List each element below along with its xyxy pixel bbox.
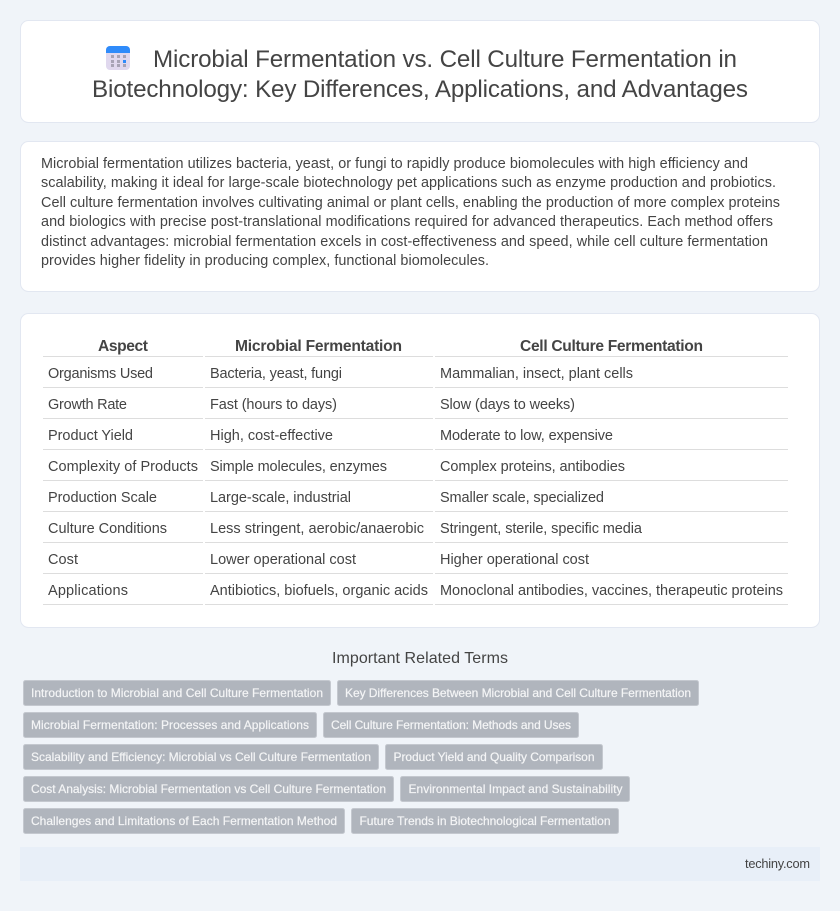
- table header: Microbial Fermentation: [235, 338, 402, 355]
- tag: [24, 680, 330, 706]
- icon: calendar: [106, 46, 130, 70]
- footer: techiny.com: [745, 856, 810, 871]
- panel: title header: [20, 20, 820, 122]
- table row: product yield: High, cost-effective: [210, 428, 333, 444]
- table row: complexity of products: Complexity of Products: [48, 459, 198, 475]
- tag: [400, 776, 630, 802]
- table row: growth rate: Fast (hours to days): [210, 397, 337, 413]
- table row: cost: Lower operational cost: [210, 552, 356, 568]
- table row: applications: [43, 583, 788, 605]
- table row: growth rate: Growth Rate: [48, 397, 127, 413]
- table row: applications: Applications: [48, 583, 128, 599]
- table row: organisms used: [43, 366, 788, 388]
- title: Biotechnology: Key Differences, Applications, and Advantages: [92, 76, 748, 103]
- table row: complexity of products: [43, 459, 788, 481]
- title: Microbial Fermentation vs. Cell Culture Fermentation in: [153, 46, 737, 73]
- table row: complexity of products: Complex proteins, antibodies: [440, 459, 625, 475]
- table header: Aspect: [98, 338, 148, 355]
- table row: culture conditions: Less stringent, aerobic/anaerobic: [210, 521, 424, 537]
- title: [92, 46, 748, 103]
- tag: Environmental Impact and Sustainability: [408, 782, 622, 796]
- heading: important related terms: Important Related Terms: [332, 650, 508, 667]
- text block: introduction: [41, 156, 780, 269]
- tag: [24, 808, 344, 834]
- tag: [352, 808, 618, 834]
- table row: production scale: [43, 490, 788, 512]
- text block: introduction: scalability, making it ideal for large-scale biotechnology pet applications such as enzyme production and probiotics.: [41, 175, 776, 191]
- tag: Cost Analysis: Microbial Fermentation vs Cell Culture Fermentation: [31, 782, 386, 796]
- tag: [386, 744, 602, 770]
- panel: introduction: [20, 142, 820, 292]
- table row: culture conditions: Culture Conditions: [48, 521, 167, 537]
- tag: Challenges and Limitations of Each Fermentation Method: [31, 814, 337, 828]
- table row: organisms used: Bacteria, yeast, fungi: [210, 366, 342, 382]
- tag: [338, 680, 698, 706]
- tag: Scalability and Efficiency: Microbial vs Cell Culture Fermentation: [31, 750, 371, 764]
- table row: production scale: Smaller scale, specialized: [440, 490, 604, 506]
- tag: Key Differences Between Microbial and Cell Culture Fermentation: [345, 686, 691, 700]
- panel: comparison table: [20, 314, 820, 628]
- tag: Product Yield and Quality Comparison: [394, 750, 594, 764]
- tag: Introduction to Microbial and Cell Culture Fermentation: [31, 686, 323, 700]
- footer: [20, 847, 820, 881]
- table row: production scale: Large-scale, industrial: [210, 490, 351, 506]
- table row: product yield: Moderate to low, expensive: [440, 428, 613, 444]
- text block: introduction: provides higher fidelity in producing complex, functional biomolecules.: [41, 253, 489, 269]
- tag: [24, 712, 316, 738]
- table row: growth rate: [43, 397, 788, 419]
- table header: [43, 338, 788, 357]
- table row: growth rate: Slow (days to weeks): [440, 397, 575, 413]
- table row: culture conditions: Stringent, sterile, specific media: [440, 521, 643, 537]
- tag: [324, 712, 578, 738]
- table row: organisms used: Mammalian, insect, plant cells: [440, 366, 633, 382]
- table row: complexity of products: Simple molecules, enzymes: [210, 459, 387, 475]
- table row: culture conditions: [43, 521, 788, 543]
- tag: Future Trends in Biotechnological Fermentation: [360, 814, 610, 828]
- text block: introduction: Cell culture fermentation involves cultivating animal or plant cells, enabling the production of more complex proteins: [41, 195, 780, 211]
- panel: related term tags: [24, 680, 698, 834]
- text block: introduction: and biologics with precise post-translational modifications required for advanced therapeutics. Each method offers: [41, 214, 773, 230]
- table row: cost: [43, 552, 788, 574]
- tag: Cell Culture Fermentation: Methods and Uses: [331, 718, 571, 732]
- table row: applications: Antibiotics, biofuels, organic acids: [210, 583, 428, 599]
- table row: product yield: [43, 428, 788, 450]
- text block: introduction: distinct advantages: microbial fermentation excels in cost-effectiveness and speed, while cell culture fermentation: [41, 234, 768, 250]
- table row: production scale: Production Scale: [48, 490, 157, 506]
- table row: product yield: Product Yield: [48, 428, 133, 444]
- table row: cost: Higher operational cost: [440, 552, 589, 568]
- table row: organisms used: Organisms Used: [48, 366, 153, 382]
- table header: Cell Culture Fermentation: [520, 338, 703, 355]
- tag: [24, 744, 378, 770]
- tag: Microbial Fermentation: Processes and Applications: [31, 718, 309, 732]
- tag: [24, 776, 394, 802]
- table row: applications: Monoclonal antibodies, vaccines, therapeutic proteins: [440, 583, 783, 599]
- text block: introduction: Microbial fermentation utilizes bacteria, yeast, or fungi to rapidly produce biomolecules with high efficiency and: [41, 156, 748, 172]
- table row: cost: Cost: [48, 552, 78, 568]
